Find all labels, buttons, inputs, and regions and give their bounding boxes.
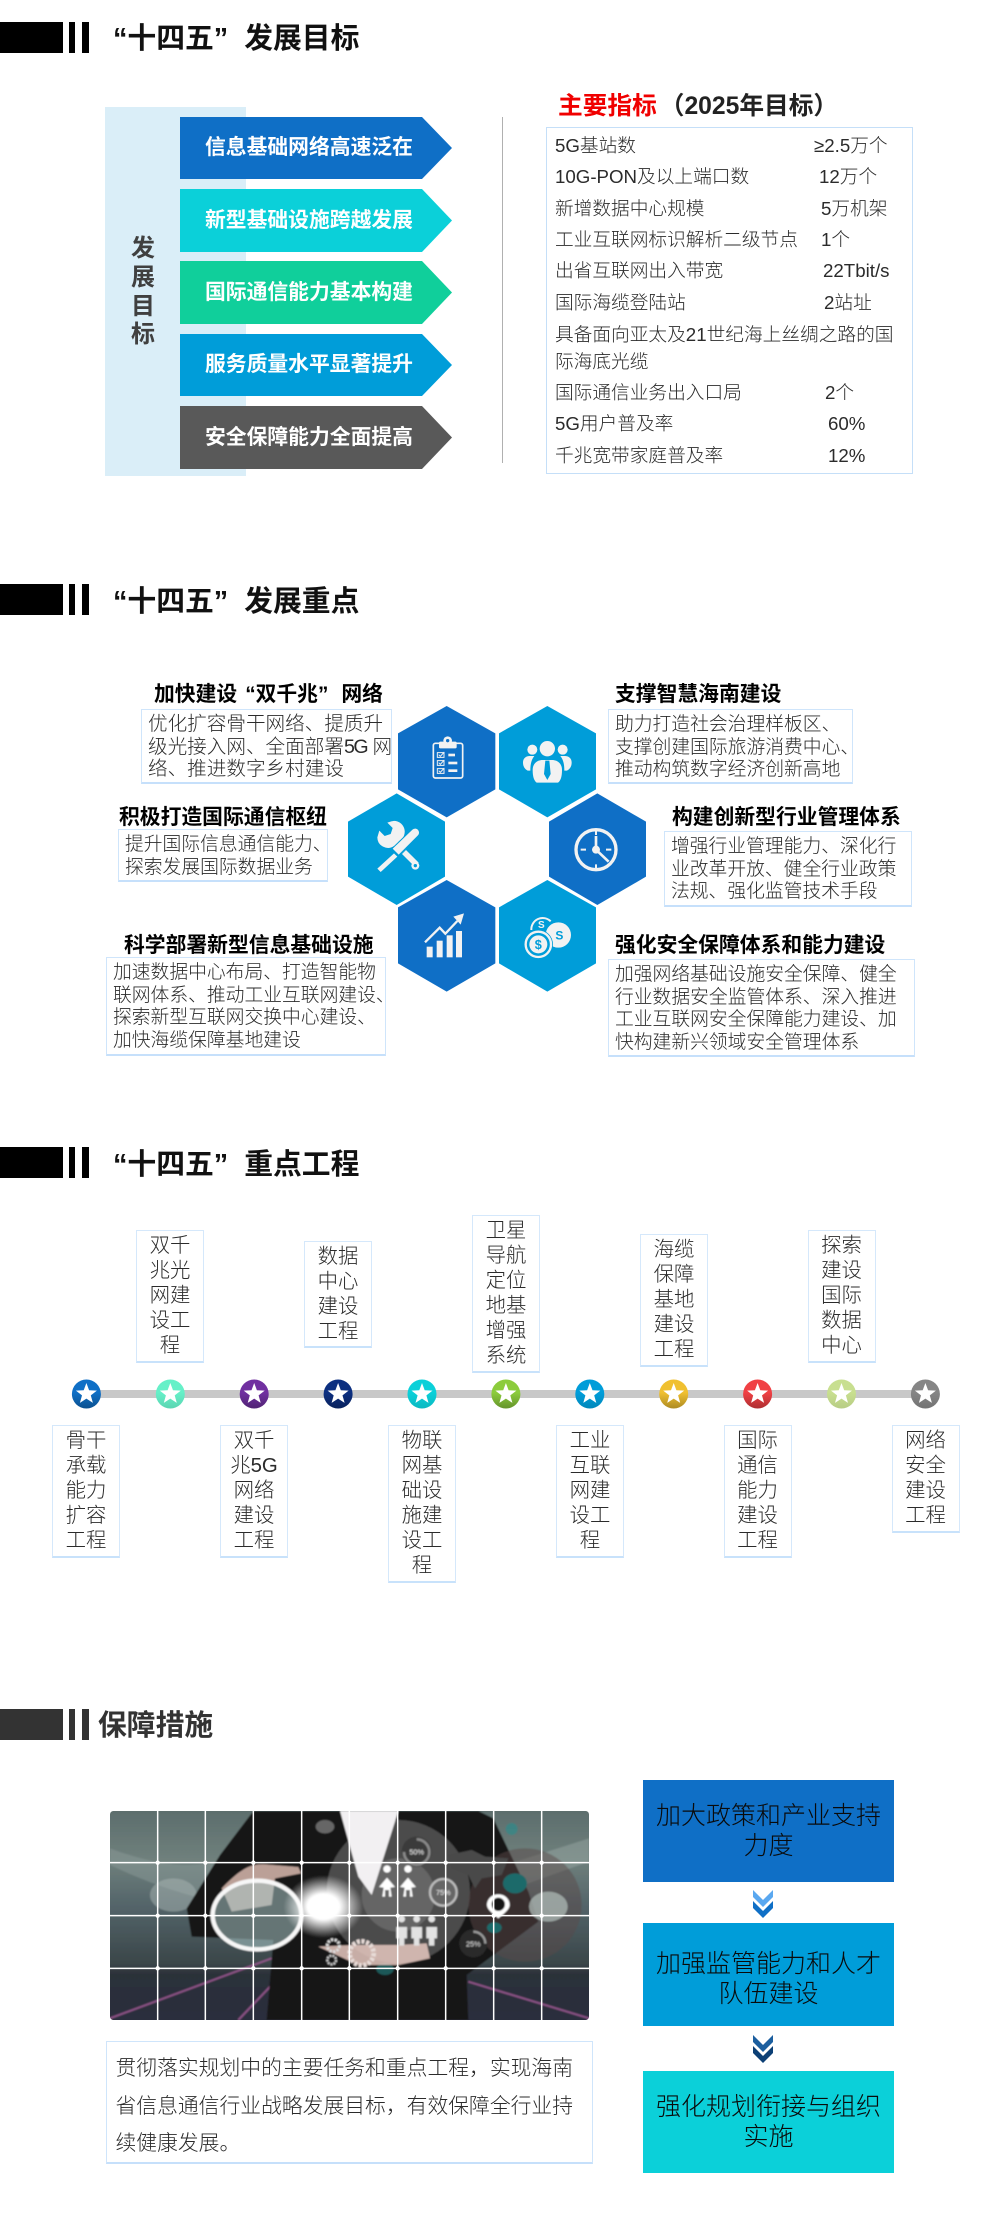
- section header: development goals: [0, 22, 359, 55]
- arrow: goal 5: 安全保障能力全面提高: [205, 426, 413, 449]
- priority text box: industry management: 法规、强化监管技术手段: [671, 880, 878, 901]
- table rows: 10G-PON及以上端口数: [555, 166, 749, 187]
- table rows: 具备面向亚太及21世纪海上丝绸之路的国: [555, 324, 893, 345]
- priority text box: security: [608, 959, 915, 1057]
- world map: [458, 1850, 508, 1888]
- project box: industrial internet: 互联: [570, 1455, 610, 1477]
- hexagon: coins: $: [535, 938, 542, 952]
- section header: safeguards: 保障措施: [98, 1710, 213, 1742]
- project box: submarine cable: 工程: [654, 1339, 694, 1361]
- project box: IoT: 网基: [402, 1455, 442, 1477]
- table rows: 国际海缆登陆站: [555, 292, 686, 313]
- project box: international capability: 工程: [737, 1530, 778, 1552]
- pink light rays: [110, 1958, 589, 2020]
- table rows: 60%: [828, 413, 865, 434]
- timeline with star markers: [72, 1380, 940, 1408]
- priority text box: new infrastructure: 联网体系、推动工业互联网建设、: [113, 984, 395, 1005]
- arrow: goal 2: [180, 189, 452, 252]
- section header: development priorities: “十四五” 发展重点: [113, 586, 359, 618]
- project box: IoT: 施建: [402, 1505, 442, 1527]
- priority heading: smart Hainan: 支撑智慧海南建设: [615, 683, 781, 706]
- project box: submarine cable: [640, 1234, 708, 1367]
- table rows: 5G基站数: [555, 135, 636, 156]
- project box: data centers: 工程: [318, 1321, 358, 1343]
- project box: IoT: 物联: [402, 1430, 442, 1452]
- project box: international capability: 建设: [737, 1505, 778, 1527]
- project box: submarine cable: 保障: [654, 1264, 694, 1286]
- project box: industrial internet: 工业: [570, 1430, 610, 1452]
- grid overlay: [110, 1811, 589, 2020]
- text box: implementation summary: 贯彻落实规划中的主要任务和重点工程，实现海南: [116, 2057, 573, 2080]
- vertical label: development goals: [131, 235, 155, 348]
- hexagon: growth chart: [398, 880, 495, 992]
- project box: gigabit optical: 设工: [150, 1310, 190, 1332]
- table rows: 出省互联网出入带宽: [555, 260, 723, 281]
- priority heading: security: 强化安全保障体系和能力建设: [615, 934, 885, 957]
- measure box: planning coordination: 实施: [743, 2123, 794, 2151]
- glow: [283, 1875, 363, 1938]
- illustration: businessperson with data overlay: [110, 1811, 589, 2020]
- priority text box: security: 加强网络基础设施安全保障、健全: [615, 963, 897, 984]
- section header: development goals: “十四五” 发展目标: [113, 23, 359, 55]
- arrow: goal 3: [180, 261, 452, 324]
- project box: backbone: 承载: [66, 1455, 106, 1477]
- section header: safeguards: [0, 1709, 213, 1742]
- table rows: [555, 135, 893, 466]
- icon: chevron down dark: [753, 2035, 773, 2063]
- illustration: businessperson with data overlay: 75%: [436, 1888, 451, 1897]
- measure box: planning coordination: 强化规划衔接与组织: [656, 2093, 881, 2121]
- project box: international data center: 建设: [821, 1260, 862, 1282]
- hexagon cluster with icons: [348, 706, 646, 992]
- project box: gigabit 5G: 双千: [234, 1430, 274, 1452]
- project box: international capability: [724, 1425, 792, 1558]
- arrow: goal 4: [180, 334, 452, 396]
- hexagon: coins: [499, 880, 596, 992]
- HUD discs: [327, 1820, 470, 1963]
- text box: implementation summary: [106, 2041, 592, 2164]
- table rows: 12%: [828, 445, 865, 466]
- text box: implementation summary: 省信息通信行业战略发展目标，有效保障全行业持: [116, 2094, 573, 2118]
- table rows: 1个: [821, 229, 850, 250]
- table rows: 5G用户普及率: [555, 413, 673, 434]
- project box: backbone: 能力: [66, 1480, 106, 1502]
- project box: satellite navigation: 导航: [486, 1245, 526, 1267]
- project box: network security: 安全: [905, 1455, 946, 1477]
- project box: gigabit 5G: 建设: [234, 1505, 274, 1527]
- women icons: [379, 1865, 416, 1897]
- project box: network security: 建设: [905, 1480, 946, 1502]
- rings and percentages: [402, 1837, 432, 1867]
- priority text box: smart Hainan: 推动构筑数字经济创新高地: [615, 758, 840, 779]
- project box: data centers: 建设: [318, 1296, 358, 1318]
- vertical label: development goals: 展: [131, 264, 155, 291]
- measure box: supervision and talent: 加强监管能力和人才: [656, 1950, 881, 1978]
- project box: gigabit 5G: 兆5G: [230, 1455, 278, 1477]
- vertical label: development goals: 发: [131, 235, 155, 262]
- arrow: goal 5: [180, 406, 452, 469]
- glass ring: [214, 1883, 300, 1948]
- arrow: goal 4: 服务质量水平显著提升: [205, 353, 413, 376]
- panel: indicators table: [546, 127, 913, 474]
- priority text box: security: 快构建新兴领域安全管理体系: [615, 1031, 859, 1052]
- measure box: policy support: 加大政策和产业支持: [656, 1802, 881, 1830]
- priority text box: international hub: 探索发展国际数据业务: [125, 856, 313, 877]
- project box: international data center: 数据: [821, 1310, 862, 1332]
- project box: international data center: [808, 1230, 876, 1363]
- priority text box: new infrastructure: [106, 957, 386, 1056]
- table rows: 千兆宽带家庭普及率: [555, 445, 723, 466]
- priority heading: dual gigabit: 加快建设 “双千兆” 网络: [154, 683, 383, 706]
- priority heading: international hub: 积极打造国际通信枢纽: [119, 806, 327, 829]
- priority text box: industry management: [664, 831, 912, 907]
- section header: development priorities: [0, 584, 359, 618]
- project box: gigabit optical: 程: [160, 1335, 180, 1357]
- hexagon: people: [499, 706, 596, 817]
- table rows: 际海底光缆: [555, 351, 648, 372]
- priority text box: security: 工业互联网安全保障能力建设、加: [615, 1008, 897, 1029]
- project box: backbone: 扩容: [66, 1505, 106, 1527]
- project box: industrial internet: 网建: [570, 1480, 610, 1502]
- project box: international capability: 国际: [737, 1430, 778, 1452]
- illustration: businessperson with data overlay: 50%: [409, 1847, 424, 1856]
- project box: IoT: 设工: [402, 1530, 442, 1552]
- hexagon: clock: [549, 793, 646, 905]
- project box: gigabit optical: [136, 1230, 204, 1363]
- priority text box: dual gigabit: 级光接入网、全面部署5G 网: [148, 736, 392, 758]
- arrow: goal 3: 国际通信能力基本构建: [205, 281, 413, 304]
- suit: [187, 1811, 538, 2020]
- project box: industrial internet: 设工: [570, 1505, 610, 1527]
- priority text box: new infrastructure: 加快海缆保障基地建设: [113, 1029, 301, 1050]
- priority text box: international hub: [118, 829, 328, 882]
- priority text box: dual gigabit: 优化扩容骨干网络、提质升: [148, 713, 383, 735]
- priority text box: smart Hainan: 支撑创建国际旅游消费中心、: [615, 736, 859, 757]
- project box: international data center: 中心: [821, 1335, 862, 1357]
- text box: implementation summary: 续健康发展。: [116, 2132, 240, 2155]
- table rows: ≥2.5万个: [814, 135, 888, 156]
- hexagon: coins: S: [555, 928, 563, 942]
- project box: satellite navigation: [472, 1215, 540, 1373]
- priority text box: security: 行业数据安全监管体系、深入推进: [615, 986, 897, 1007]
- project box: satellite navigation: 卫星: [486, 1220, 526, 1242]
- measure box: policy support: [643, 1780, 894, 1882]
- hexagon: clipboard: [398, 706, 495, 817]
- hexagon: tools: [348, 793, 445, 905]
- project box: international capability: 能力: [737, 1480, 778, 1502]
- hexagon: coins: S: [538, 920, 545, 931]
- project box: gigabit 5G: 网络: [234, 1480, 274, 1502]
- priority text box: industry management: 增强行业管理能力、深化行: [671, 835, 896, 856]
- hands: [222, 1864, 301, 1912]
- priority text box: smart Hainan: 助力打造社会治理样板区、: [615, 713, 840, 734]
- project box: satellite navigation: 系统: [486, 1345, 526, 1367]
- illustration: businessperson with data overlay: 25%: [466, 1939, 481, 1948]
- project box: international data center: 探索: [821, 1235, 862, 1257]
- map pin: [487, 1894, 510, 1918]
- project box: data centers: [304, 1241, 372, 1348]
- project box: satellite navigation: 地基: [486, 1295, 526, 1317]
- project box: industrial internet: [556, 1425, 624, 1558]
- measure box: planning coordination: [643, 2071, 894, 2173]
- vertical label: development goals: 目: [131, 293, 155, 320]
- men icons: [396, 1916, 437, 1946]
- table rows: 新增数据中心规模: [555, 198, 704, 219]
- project box: industrial internet: 程: [580, 1530, 600, 1552]
- heading: key indicators: 主要指标（2025年目标）: [558, 93, 838, 120]
- project box: gigabit optical: 双千: [150, 1235, 190, 1257]
- project box: data centers: 数据: [318, 1246, 358, 1268]
- project box: backbone: [52, 1425, 120, 1558]
- shirt: [340, 1811, 398, 1895]
- project box: backbone: 工程: [66, 1530, 106, 1552]
- vertical label: development goals: 标: [131, 321, 155, 348]
- table rows: 22Tbit/s: [823, 260, 889, 281]
- section header: key projects: [0, 1147, 359, 1181]
- project box: satellite navigation: 定位: [486, 1270, 526, 1292]
- project box: gigabit optical: 网建: [150, 1285, 190, 1307]
- project box: backbone: 骨干: [66, 1430, 106, 1452]
- priority heading: new infrastructure: 科学部署新型信息基础设施: [124, 934, 374, 957]
- project box: submarine cable: 建设: [654, 1314, 694, 1336]
- arrow: goal 1: 信息基础网络高速泛在: [205, 136, 413, 159]
- table rows: 12万个: [819, 166, 877, 187]
- project box: network security: 工程: [905, 1505, 946, 1527]
- icon: chevron down light: [753, 1890, 773, 1918]
- project box: IoT: [388, 1425, 456, 1583]
- table rows: 国际通信业务出入口局: [555, 382, 742, 403]
- project box: gigabit 5G: 工程: [234, 1530, 274, 1552]
- project box: international data center: 国际: [821, 1285, 862, 1307]
- table rows: 2个: [825, 382, 854, 403]
- project box: gigabit 5G: [220, 1425, 288, 1558]
- project box: gigabit optical: 兆光: [150, 1260, 190, 1282]
- project box: network security: 网络: [905, 1430, 946, 1452]
- measure box: policy support: 力度: [743, 1832, 794, 1860]
- section header: key projects: “十四五” 重点工程: [113, 1149, 359, 1181]
- priority heading: industry management: 构建创新型行业管理体系: [672, 806, 901, 829]
- priority text box: new infrastructure: 加速数据中心布局、打造智能物: [113, 961, 376, 982]
- priority text box: international hub: 提升国际信息通信能力、: [125, 833, 332, 854]
- table rows: 5万机架: [821, 198, 887, 219]
- project box: IoT: 础设: [402, 1480, 442, 1502]
- measure box: supervision and talent: [643, 1923, 894, 2026]
- project box: submarine cable: 海缆: [654, 1239, 694, 1261]
- priority text box: dual gigabit: [141, 709, 392, 784]
- table rows: 2站址: [824, 292, 872, 313]
- divider: [502, 117, 503, 463]
- panel: goals backdrop: [105, 107, 246, 476]
- measure box: supervision and talent: 队伍建设: [718, 1980, 818, 2008]
- priority text box: smart Hainan: [608, 709, 853, 784]
- project box: network security: [892, 1425, 960, 1533]
- gears: [327, 1940, 339, 1952]
- priority text box: new infrastructure: 探索新型互联网交换中心建设、: [113, 1006, 376, 1027]
- table rows: 工业互联网标识解析二级节点: [555, 229, 798, 250]
- project box: international capability: 通信: [737, 1455, 778, 1477]
- priority text box: industry management: 业改革开放、健全行业政策: [671, 858, 896, 879]
- project box: submarine cable: 基地: [654, 1289, 694, 1311]
- priority text box: dual gigabit: 络、推进数字乡村建设: [148, 758, 344, 780]
- arrow: goal 2: 新型基础设施跨越发展: [205, 209, 413, 232]
- project box: data centers: 中心: [318, 1271, 358, 1293]
- project box: IoT: 程: [412, 1555, 432, 1577]
- project box: satellite navigation: 增强: [486, 1320, 526, 1342]
- arrow: goal 1: [180, 117, 452, 179]
